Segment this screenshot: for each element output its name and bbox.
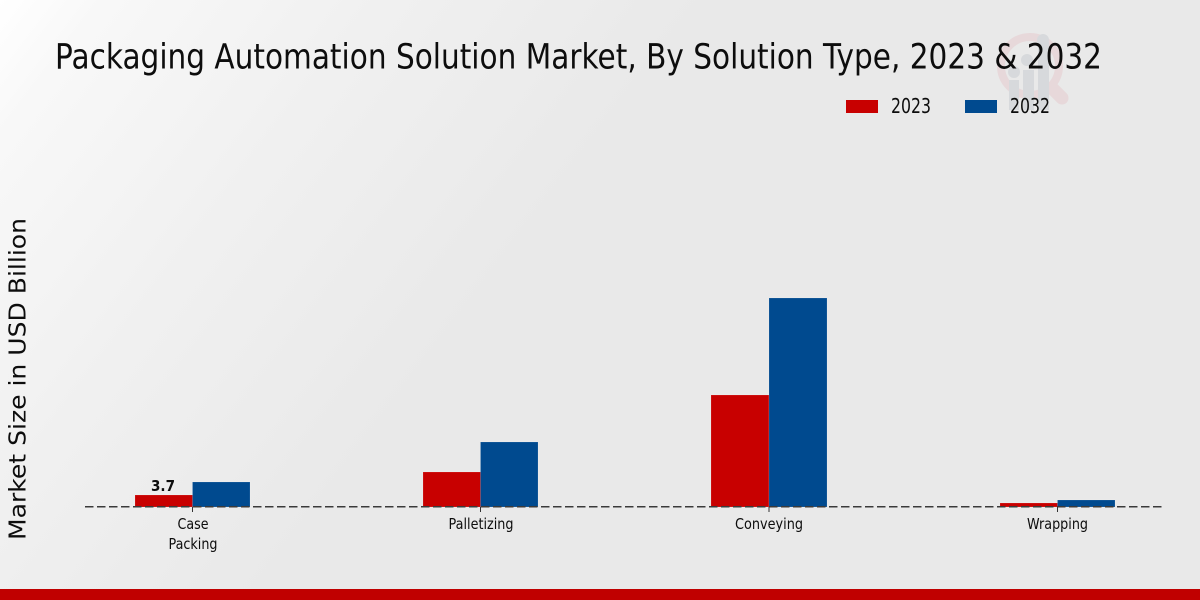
legend item: 2032: 2032 (1010, 94, 1050, 118)
footer bar (0, 589, 1200, 600)
category label: Case Packing (168, 515, 218, 553)
group: Case Packing (135, 477, 250, 507)
category label: Wrapping: Wrapping (1027, 515, 1088, 533)
legend item: 2023: 2023 (891, 94, 931, 118)
data label: 3.7: 3.7 (151, 477, 175, 495)
group: Conveying (711, 298, 827, 507)
category label: Case Packing: Packing (168, 535, 218, 553)
group: Palletizing (423, 442, 538, 507)
bar chart (135, 298, 1115, 507)
x-axis baseline (85, 507, 1164, 512)
legend item: 2023 (846, 94, 931, 118)
category label: Palletizing: Palletizing (448, 515, 514, 533)
y-axis label: Market Size in USD Billion (4, 218, 32, 540)
group: Wrapping (1000, 500, 1115, 507)
legend (846, 94, 1050, 118)
category label: Conveying: Conveying (735, 515, 803, 533)
watermark logo (1001, 34, 1062, 110)
legend item: 2032 (965, 94, 1050, 118)
category label: Case Packing: Case (178, 515, 208, 533)
